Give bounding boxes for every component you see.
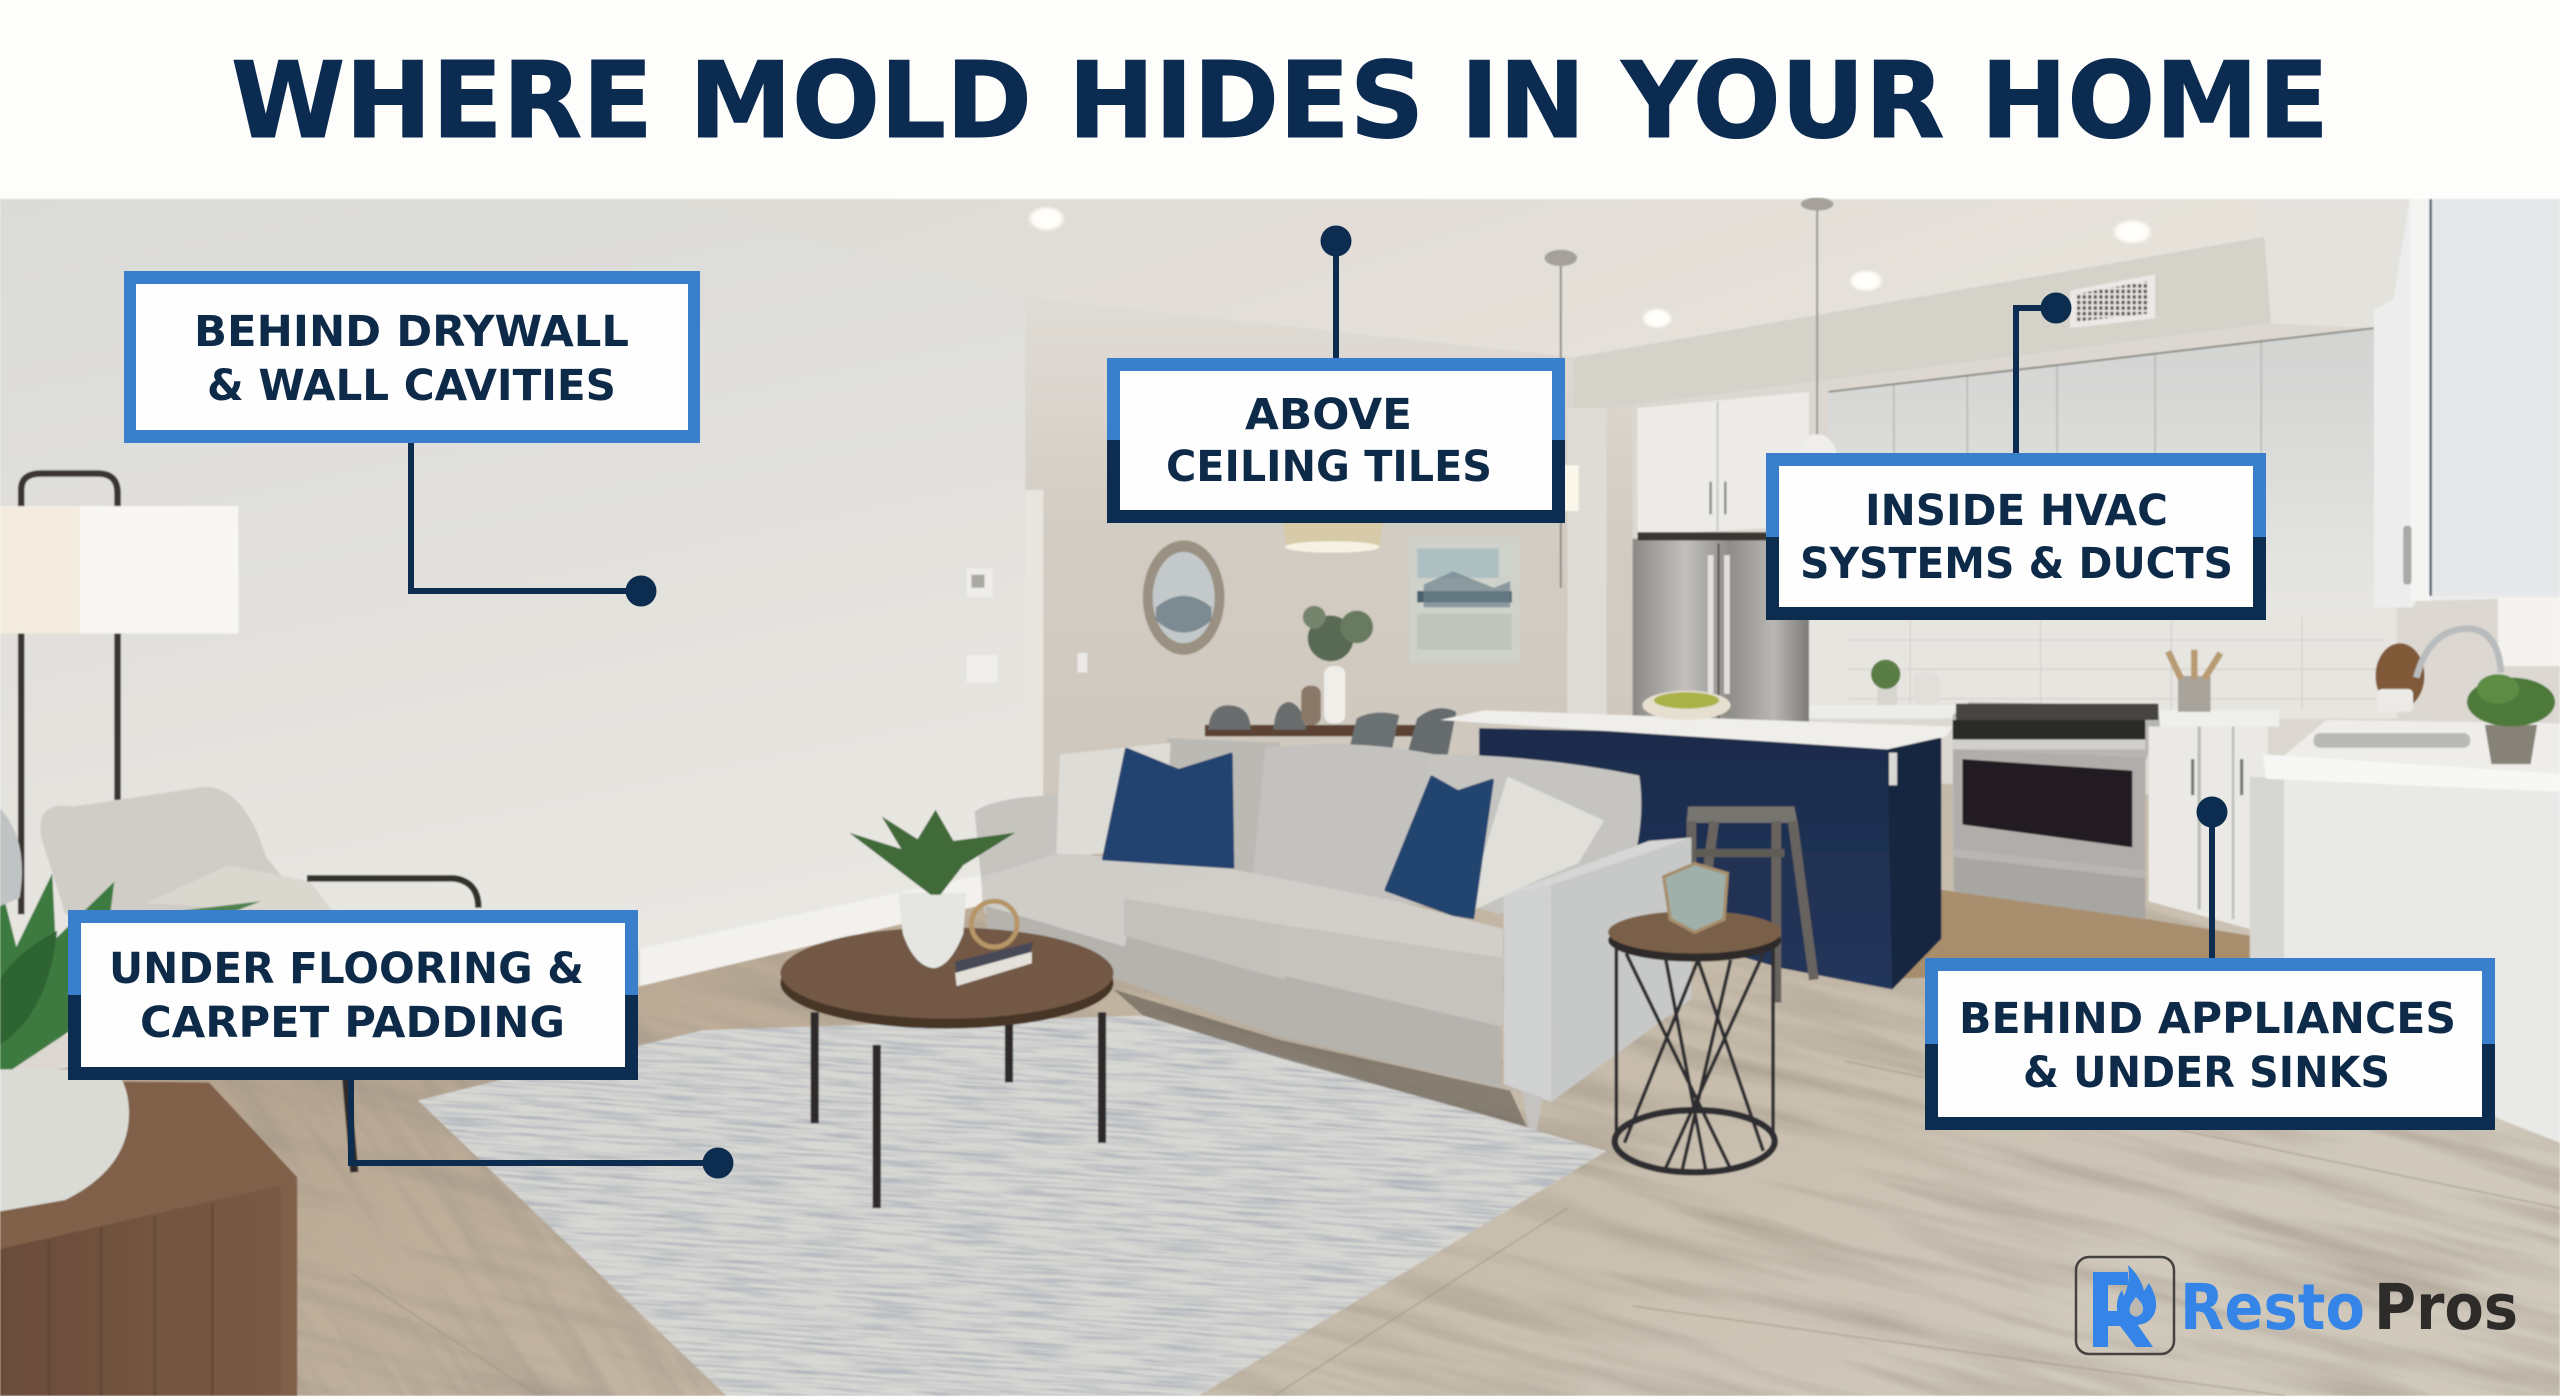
title: WHERE MOLD HIDES IN YOUR HOME xyxy=(231,39,2329,162)
counter plant xyxy=(2467,674,2555,764)
round mirror xyxy=(1143,540,1224,655)
sofa pillows xyxy=(1058,744,1602,918)
window and wall at right xyxy=(2498,598,2560,666)
connector: ceiling xyxy=(1320,226,1352,358)
stove xyxy=(1953,702,2160,919)
callout: under flooring: UNDER FLOORING & xyxy=(109,945,584,994)
callout: behind appliances: BEHIND APPLIANCES xyxy=(1959,995,2456,1044)
callout: above ceiling tiles: CEILING TILES xyxy=(1166,443,1492,492)
abstract painting xyxy=(1409,537,1520,663)
connector: appliances xyxy=(2196,796,2228,958)
logo icon xyxy=(2076,1257,2174,1354)
callout: behind drywall: & WALL CAVITIES xyxy=(207,362,616,411)
upper cabinets over fridge xyxy=(1638,392,1809,536)
side table xyxy=(1608,864,1781,1172)
base cabinets xyxy=(2149,727,2268,934)
connector: hvac xyxy=(2016,292,2072,453)
kitchen wall band xyxy=(1574,237,2271,408)
backsplash xyxy=(1809,604,2397,718)
connector: flooring xyxy=(351,1080,734,1178)
soffit xyxy=(2261,199,2410,328)
potted plant xyxy=(0,808,261,1211)
logo: RestoPros xyxy=(2076,1257,2518,1354)
callout: above ceiling tiles xyxy=(1107,226,1565,523)
wall controls xyxy=(967,568,1087,682)
sofa shadow xyxy=(1113,989,1527,1127)
callout: inside hvac xyxy=(1766,292,2266,620)
dining set xyxy=(1205,606,1456,761)
pendant lights xyxy=(1283,198,1837,588)
ceiling lights xyxy=(1027,206,2153,329)
baseboard xyxy=(640,865,1025,986)
doorway trim xyxy=(1025,490,1043,800)
callout: behind drywall xyxy=(124,271,700,606)
vent xyxy=(2070,274,2155,328)
floor xyxy=(0,767,2560,1396)
connector: drywall xyxy=(411,443,656,606)
table plant in vase xyxy=(849,810,1016,968)
column xyxy=(1567,408,1607,727)
tall corner cabinets xyxy=(2374,199,2560,607)
faucet xyxy=(2416,629,2501,678)
coffee table xyxy=(780,901,1113,1208)
island xyxy=(1440,691,1953,989)
callout: behind appliances: & UNDER SINKS xyxy=(2023,1049,2390,1098)
callout: inside hvac: SYSTEMS & DUCTS xyxy=(1800,540,2233,589)
armchair xyxy=(40,787,478,1172)
ceiling xyxy=(653,199,2264,358)
dining back wall xyxy=(1025,297,1633,816)
callout: under flooring xyxy=(68,910,734,1178)
callout: under flooring: CARPET PADDING xyxy=(140,999,565,1048)
L counter and white peninsula xyxy=(2250,720,2560,1143)
callout: behind appliances xyxy=(1925,796,2495,1130)
title band xyxy=(0,0,2560,199)
wood console xyxy=(0,1081,297,1396)
callout: inside hvac: INSIDE HVAC xyxy=(1865,487,2168,536)
sofa xyxy=(975,738,1691,1151)
refrigerator xyxy=(1633,532,1809,723)
rug xyxy=(418,1016,1607,1396)
logo wordmark: Pros xyxy=(2374,1271,2518,1344)
back counter items xyxy=(1809,643,2424,727)
metal stool xyxy=(1687,807,1814,1002)
upper kitchen cabinets xyxy=(1829,328,2374,617)
kitchen floor patch xyxy=(1878,890,2278,980)
logo wordmark: Resto xyxy=(2180,1271,2365,1344)
left wall xyxy=(0,199,1025,1045)
floor lamp xyxy=(0,473,238,914)
callout: behind drywall: BEHIND DRYWALL xyxy=(194,308,629,357)
callout: above ceiling tiles: ABOVE xyxy=(1245,391,1412,440)
